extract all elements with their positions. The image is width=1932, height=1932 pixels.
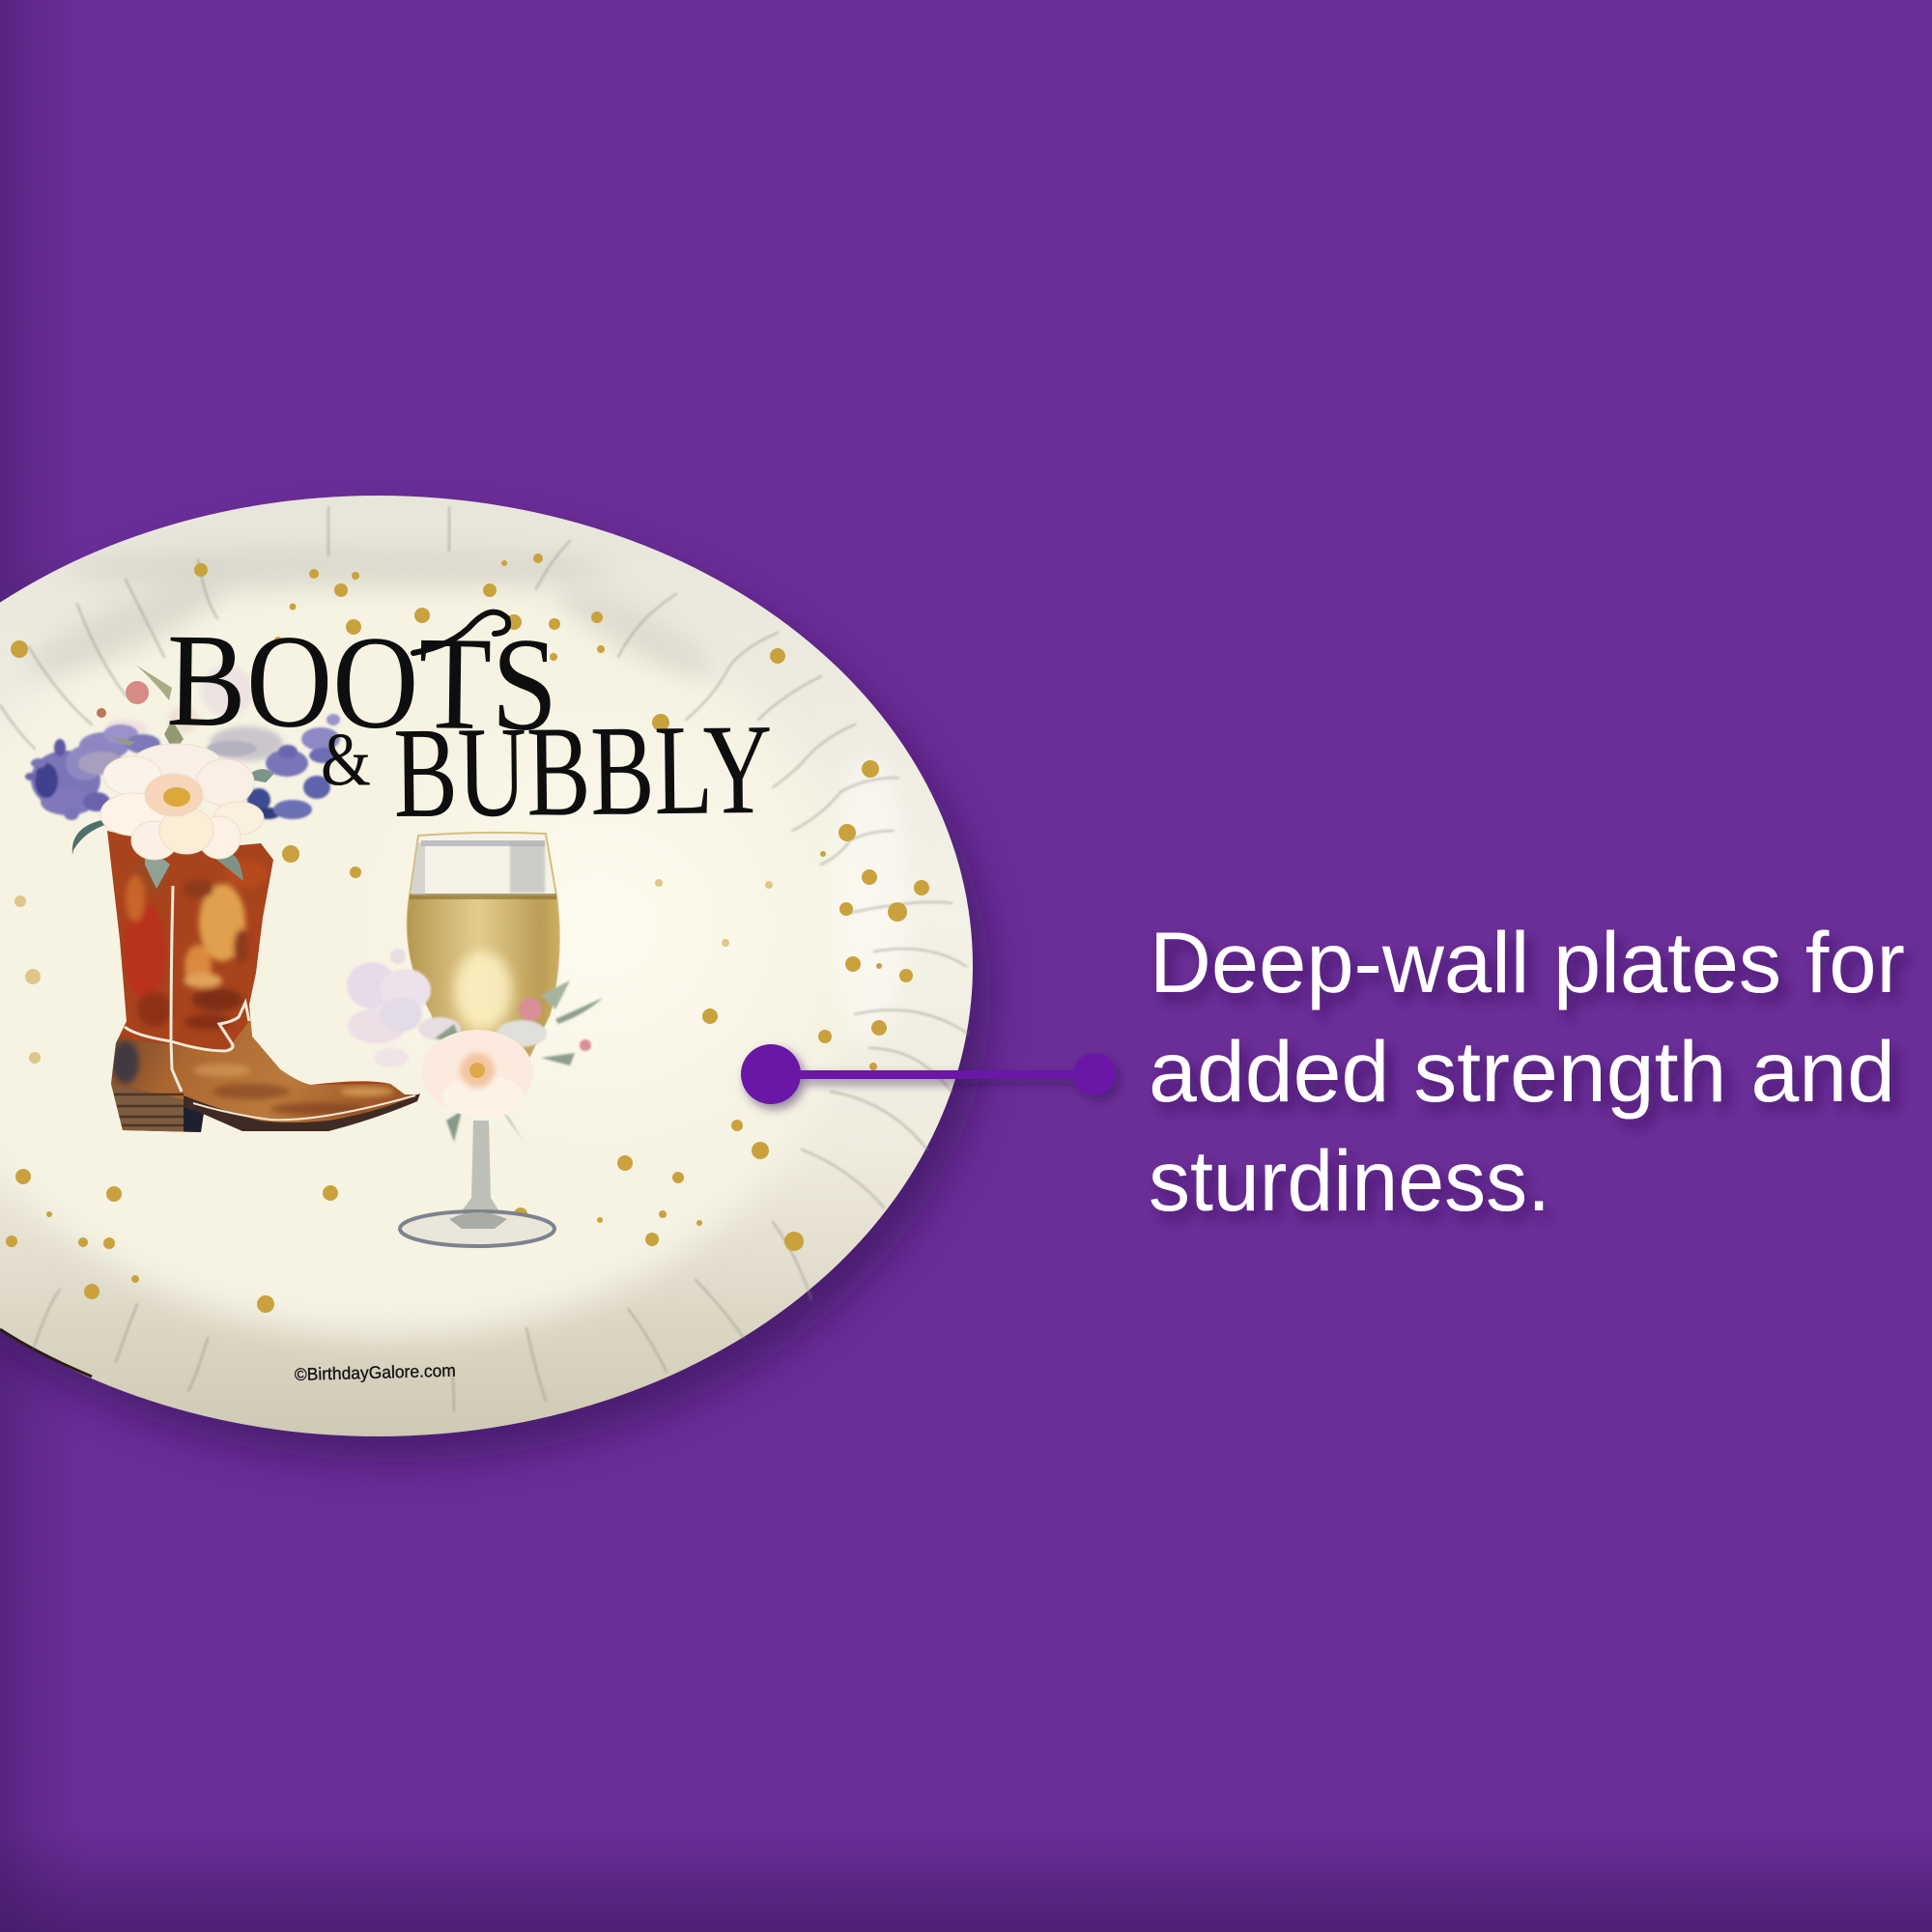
lavender clusters xyxy=(25,714,340,820)
flower bouquet on boot xyxy=(25,665,340,889)
glass floral wreath xyxy=(347,949,603,1142)
boot vamp xyxy=(111,1021,420,1130)
boot heel xyxy=(109,1084,184,1132)
plate title: Boots & Bubbly: BOOTS xyxy=(166,606,558,758)
champagne glass illustration xyxy=(347,833,603,1246)
plate body xyxy=(0,496,973,1436)
dark lower-left rim edge xyxy=(0,1329,92,1377)
glass bowl xyxy=(408,833,559,1063)
rim crease lines xyxy=(0,507,968,1410)
callout text xyxy=(1149,914,1905,1229)
pale sprays behind title xyxy=(104,666,283,761)
callout text: sturdiness. xyxy=(1149,1132,1550,1229)
plate title: Boots & Bubbly: BUBBLY xyxy=(393,697,773,844)
callout text: Deep-wall plates for xyxy=(1150,914,1905,1010)
boot leather blotches xyxy=(124,855,268,1030)
glass stem and base xyxy=(456,1121,504,1219)
plate well and shading xyxy=(0,547,908,1335)
title swash decorations xyxy=(413,612,508,653)
callout connector with dots xyxy=(741,1044,1116,1104)
bouquet leaves and rosebud xyxy=(72,819,108,855)
plate drop shadow xyxy=(0,521,990,1462)
gold confetti dots xyxy=(6,554,929,1313)
plate xyxy=(0,496,990,1462)
plate title: Boots & Bubbly xyxy=(166,606,773,844)
boot seams xyxy=(125,886,249,1092)
plate title: Boots & Bubbly: & xyxy=(321,717,371,801)
cowboy boot illustration xyxy=(107,831,420,1132)
callout text: added strength and xyxy=(1149,1023,1895,1120)
peony flower xyxy=(100,744,264,860)
plate copyright text: ©BirthdayGalore.com xyxy=(295,1361,456,1384)
boot sole xyxy=(184,1094,420,1131)
